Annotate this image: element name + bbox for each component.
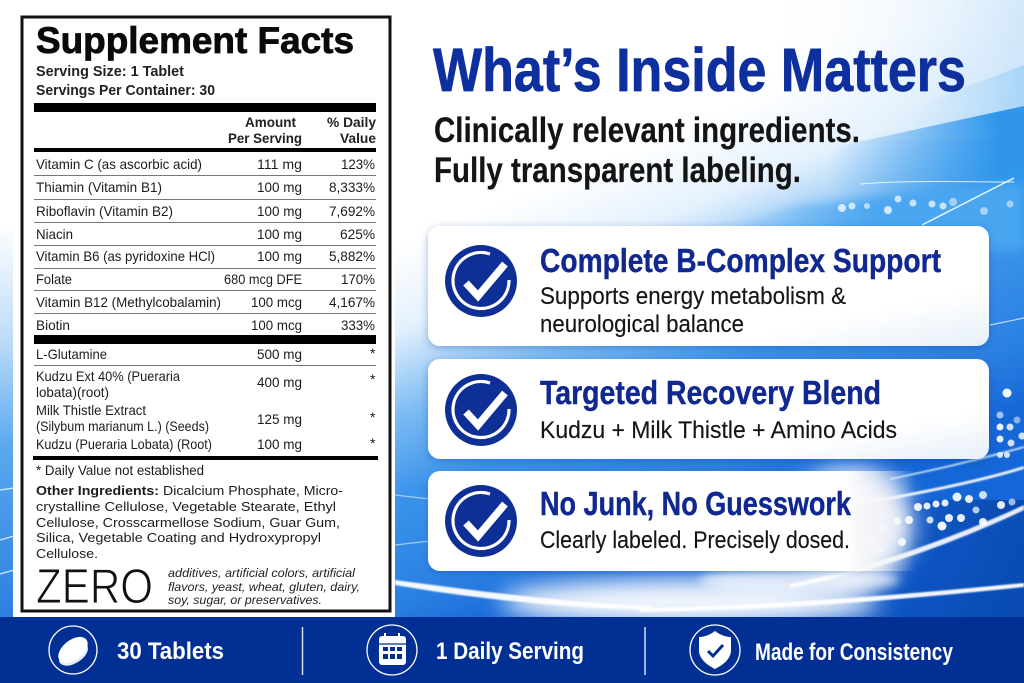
table: vitamins: 100 mcg (251, 317, 302, 333)
heading: Supplement Facts: Supplement Facts (36, 20, 354, 61)
subtitle: Fully transparent labeling. (434, 151, 801, 190)
table: vitamins: Vitamin B6 (as pyridoxine HCl) (36, 248, 215, 264)
table: proprietary ingredients: L-Glutamine (36, 346, 107, 362)
table: vitamins: 333% (341, 317, 375, 333)
icon: calendar (367, 625, 417, 675)
footer band (0, 617, 1024, 683)
icon: check circle (445, 374, 517, 446)
serving information (36, 64, 215, 99)
table header: % Daily (327, 114, 376, 130)
table header: Per Serving (228, 130, 302, 146)
ZERO claim: ZERO (36, 560, 153, 614)
card heading: Complete B-Complex Support (540, 242, 941, 279)
table header: Amount (245, 114, 296, 130)
ZERO claim: additives, artificial colors, artificial (168, 566, 355, 580)
other ingredients: Dicalcium Phosphate, Micro- (163, 483, 343, 498)
icon: check circle (445, 485, 517, 557)
table: vitamins: 100 mg (257, 203, 302, 219)
table: vitamins: Thiamin (Vitamin B1) (36, 179, 162, 195)
table: proprietary ingredients: 400 mg (257, 374, 302, 390)
other ingredients: Cellulose, Crosscarmellose Sodium, Guar Gum, (36, 515, 340, 530)
table: proprietary ingredients: Kudzu (Pueraria Lobata) (Root) (36, 436, 212, 452)
table: vitamins: Folate (36, 271, 72, 287)
card text: Kudzu + Milk Thistle + Amino Acids (540, 417, 897, 444)
decorative dots (838, 196, 1024, 552)
ZERO claim: soy, sugar, or preservatives. (168, 593, 322, 607)
table: proprietary ingredients: 100 mg (257, 436, 302, 452)
table: proprietary ingredients: Milk Thistle Extract (36, 402, 146, 418)
panel: supplement facts label (13, 0, 395, 617)
card: Complete B-Complex Support (428, 226, 989, 346)
ZERO claim (36, 560, 360, 614)
table: vitamins: 7,692% (329, 203, 375, 219)
table: proprietary ingredients: * (370, 409, 376, 425)
footer label: daily serving: 1 Daily Serving (436, 638, 584, 665)
other ingredients: Silica, Vegetable Coating and Hydroxypropyl (36, 530, 321, 545)
card heading: No Junk, No Guesswork (540, 485, 852, 522)
card: No Junk, No Guesswork (428, 471, 915, 571)
card text: Clearly labeled. Precisely dosed. (540, 527, 850, 554)
table: proprietary ingredients: (Silybum marianum L.) (Seeds) (36, 418, 209, 434)
icon: shield check (690, 625, 740, 675)
table: vitamins: 680 mcg DFE (224, 271, 302, 287)
table: vitamins: 170% (341, 271, 375, 287)
table: proprietary ingredients: 125 mg (257, 411, 302, 427)
table: vitamins: 5,882% (329, 248, 375, 264)
table: vitamins: 100 mg (257, 179, 302, 195)
table: vitamins: 123% (341, 156, 375, 172)
other ingredients: Other Ingredients: (36, 483, 159, 498)
table: vitamins: 111 mg (257, 156, 302, 172)
card heading: Targeted Recovery Blend (540, 374, 881, 411)
table: vitamins: 8,333% (329, 179, 375, 195)
table: proprietary ingredients (33, 335, 378, 460)
card text: neurological balance (540, 311, 744, 338)
footer label: consistency: Made for Consistency (755, 639, 954, 666)
table: vitamins: 100 mcg (251, 294, 302, 310)
table: proprietary ingredients: * (370, 371, 376, 387)
other ingredients: Cellulose. (36, 546, 98, 561)
card: Targeted Recovery Blend (428, 359, 989, 459)
table: proprietary ingredients: * (370, 435, 376, 451)
table: vitamins: Vitamin B12 (Methylcobalamin) (36, 294, 221, 310)
card text: Supports energy metabolism & (540, 283, 846, 310)
table: proprietary ingredients: lobata)(root) (36, 384, 109, 400)
serving information: Servings Per Container: 30 (36, 83, 215, 99)
table: proprietary ingredients: * (370, 345, 376, 361)
icon: check circle (445, 245, 517, 317)
card text (540, 283, 846, 338)
subtitle: Clinically relevant ingredients. (434, 111, 860, 150)
table: vitamins: 4,167% (329, 294, 375, 310)
table: vitamins: Niacin (36, 226, 73, 242)
serving information: Serving Size: 1 Tablet (36, 64, 184, 80)
footnote: * Daily Value not established (36, 462, 204, 478)
table: proprietary ingredients: 500 mg (257, 346, 302, 362)
table: vitamins: Biotin (36, 317, 70, 333)
table header: Value (340, 130, 376, 146)
table header (34, 103, 376, 152)
icon: tablet (49, 626, 97, 674)
footer label: tablets: 30 Tablets (117, 638, 224, 665)
table: vitamins: Riboflavin (Vitamin B2) (36, 203, 173, 219)
other ingredients (36, 483, 343, 561)
table: vitamins (34, 156, 376, 333)
table: vitamins: 100 mg (257, 226, 302, 242)
other ingredients: crystalline Cellulose, Vegetable Stearate, Ethyl (36, 499, 336, 514)
ZERO claim: flavors, yeast, wheat, gluten, dairy, (168, 580, 360, 594)
table: vitamins: 625% (340, 226, 375, 242)
subtitle (434, 111, 860, 190)
table: proprietary ingredients: Kudzu Ext 40% (Pueraria (36, 368, 180, 384)
table: vitamins: Vitamin C (as ascorbic acid) (36, 156, 202, 172)
table: vitamins: 100 mg (257, 248, 302, 264)
